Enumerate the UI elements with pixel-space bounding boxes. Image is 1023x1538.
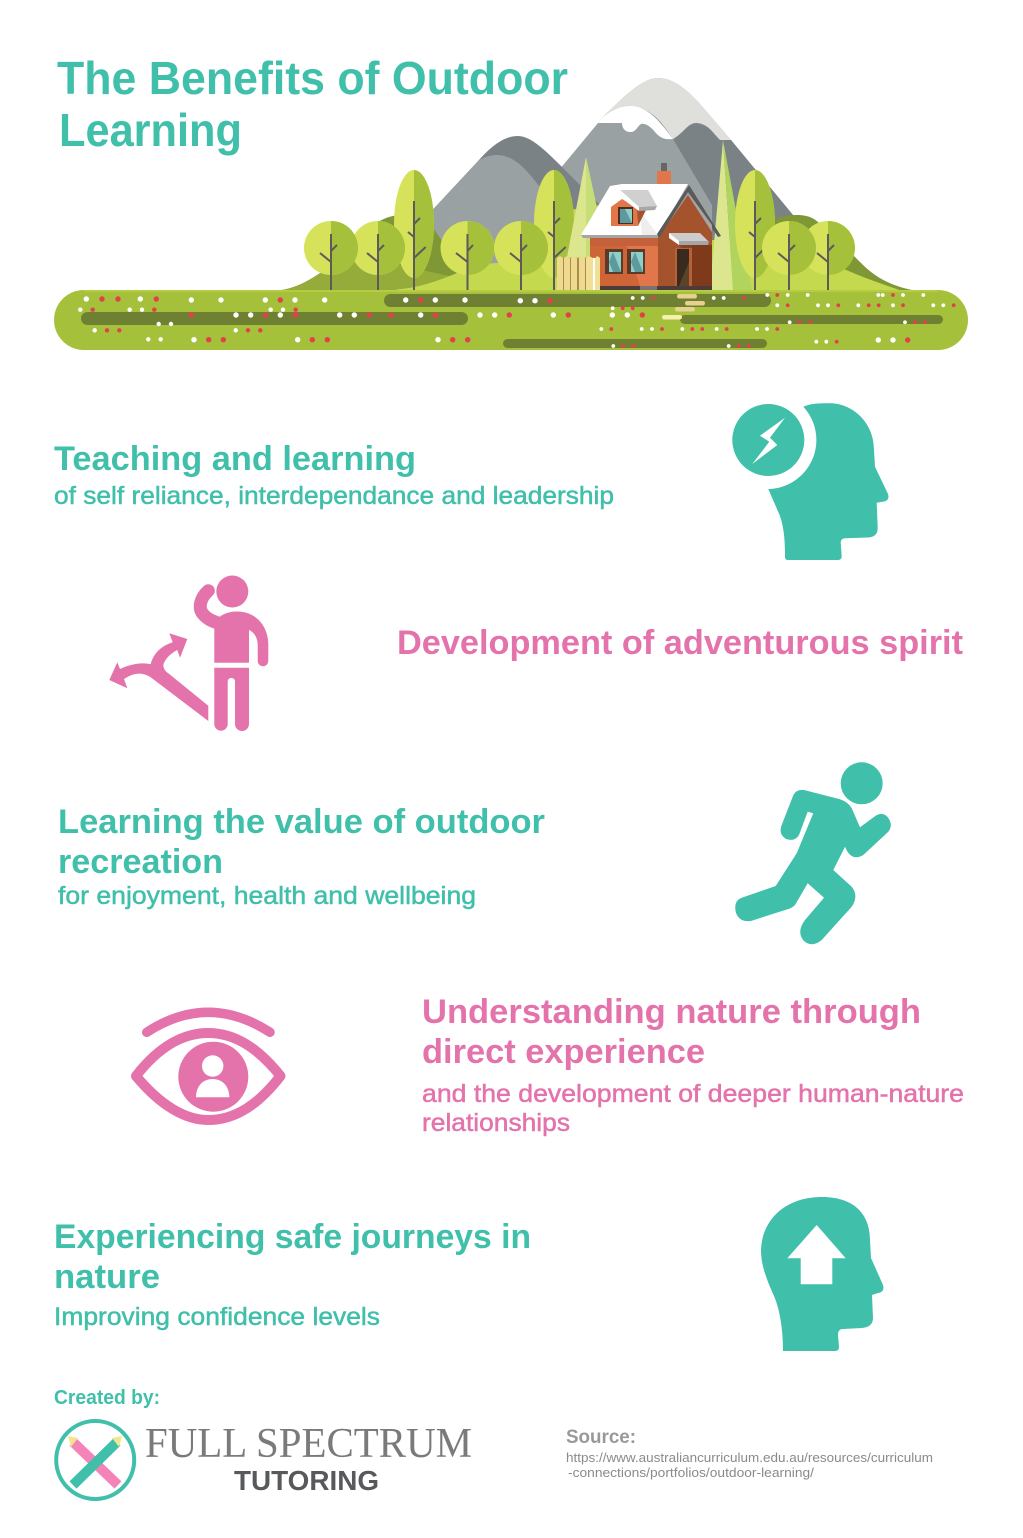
text block: teaching and learning: Teaching and learning [54, 440, 416, 478]
source: https://www.australiancurriculum.edu.au/resources/curriculum [566, 1451, 933, 1465]
text block: outdoor recreation: recreation [58, 843, 223, 881]
ground [54, 290, 968, 350]
text block: understanding nature: relationships [422, 1109, 570, 1137]
text block: safe journeys: Improving confidence levels [54, 1303, 380, 1331]
round trees [304, 221, 855, 290]
text block: safe journeys: Experiencing safe journeys in [54, 1218, 531, 1256]
text block: understanding nature [422, 993, 964, 1137]
stepping stones path [662, 294, 705, 320]
right mountain [545, 78, 800, 290]
house [581, 163, 721, 290]
fence [557, 256, 600, 290]
text block: safe journeys: nature [54, 1258, 160, 1296]
illustration: landscape with house [54, 78, 968, 350]
ground dark stripes [81, 294, 943, 348]
icon: eye with person [136, 1012, 280, 1120]
icon: running person [735, 762, 891, 944]
text block: understanding nature: and the development of deeper human-nature [422, 1080, 964, 1108]
logo wordmark [145, 1421, 472, 1496]
source [566, 1427, 933, 1480]
ground flowers [78, 293, 956, 348]
title [57, 52, 568, 156]
text block: outdoor recreation [58, 803, 545, 910]
title: Learning [59, 104, 242, 156]
logo wordmark: TUTORING [234, 1465, 379, 1496]
logo: full spectrum tutoring [56, 1421, 472, 1499]
title: The Benefits of Outdoor [57, 52, 568, 104]
text block: outdoor recreation: for enjoyment, health and wellbeing [58, 882, 476, 910]
text block: understanding nature: Understanding nature through [422, 993, 921, 1031]
text block: safe journeys [54, 1218, 531, 1331]
icon: head with up arrow [761, 1197, 883, 1351]
source: -connections/portfolios/outdoor-learning/ [568, 1466, 815, 1480]
logo icon: crossed pencils [56, 1421, 134, 1499]
logo wordmark: FULL SPECTRUM [145, 1421, 472, 1467]
ground top highlight [84, 290, 938, 292]
created by label: Created by: [54, 1387, 160, 1409]
hills [268, 205, 917, 291]
left mountain [425, 136, 605, 290]
text block: teaching and learning: of self reliance, interdependance and leadership [54, 482, 614, 510]
heading: adventurous spirit: Development of adventurous spirit [397, 624, 963, 662]
icon: head with lightning bolt [732, 403, 888, 560]
tall tree right [735, 170, 775, 290]
source: Source: [566, 1427, 636, 1448]
tall trees [394, 170, 574, 290]
text block: outdoor recreation: Learning the value of outdoor [58, 803, 545, 841]
text block: teaching and learning [54, 440, 614, 510]
text block: understanding nature: direct experience [422, 1033, 705, 1071]
icon: person at crossroads [109, 576, 268, 731]
cone trees [567, 140, 752, 290]
